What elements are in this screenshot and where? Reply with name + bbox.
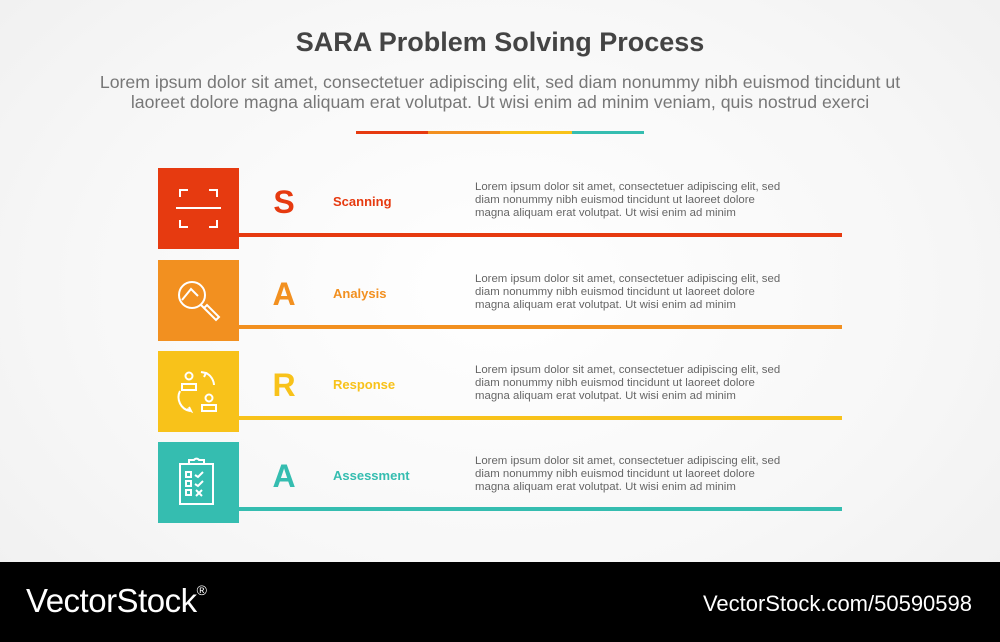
description: Lorem ipsum dolor sit amet, consectetuer adipiscing elit, sed <box>475 181 780 193</box>
description: diam nonummy nibh euismod tincidunt ut laoreet dolore <box>475 468 755 480</box>
label: Assessment <box>333 468 410 483</box>
description: Lorem ipsum dolor sit amet, consectetuer adipiscing elit, sed <box>475 364 780 376</box>
line <box>239 233 842 237</box>
description: magna aliquam erat volutpat. Ut wisi enim ad minim <box>475 481 736 493</box>
description <box>475 181 780 219</box>
row: Assessment <box>158 442 842 523</box>
subtitle: laoreet dolore magna aliquam erat volutpat. Ut wisi enim ad minim veniam, quis nostrud exerci <box>131 92 869 112</box>
line <box>239 416 842 420</box>
row: Response <box>158 351 842 432</box>
description: Lorem ipsum dolor sit amet, consectetuer adipiscing elit, sed <box>475 455 780 467</box>
icon box: people exchange <box>158 351 239 432</box>
letter A: A <box>272 458 296 494</box>
letter A: A <box>272 276 296 312</box>
description: magna aliquam erat volutpat. Ut wisi enim ad minim <box>475 207 736 219</box>
description <box>475 364 780 402</box>
footer url: VectorStock.com/50590598 <box>703 591 972 616</box>
description: diam nonummy nibh euismod tincidunt ut laoreet dolore <box>475 194 755 206</box>
description: magna aliquam erat volutpat. Ut wisi enim ad minim <box>475 390 736 402</box>
letter R: R <box>272 367 296 403</box>
line <box>239 507 842 511</box>
description <box>475 273 780 311</box>
icon box: magnifier <box>158 260 239 341</box>
color bar <box>356 131 644 134</box>
description: diam nonummy nibh euismod tincidunt ut laoreet dolore <box>475 286 755 298</box>
icon box: scan <box>158 168 239 249</box>
title: SARA Problem Solving Process <box>296 27 704 57</box>
subtitle <box>100 72 900 112</box>
row: Scanning <box>158 168 842 249</box>
label: Response <box>333 377 395 392</box>
label: Analysis <box>333 286 386 301</box>
line <box>239 325 842 329</box>
label: Scanning <box>333 194 392 209</box>
footer logo: VectorStock® <box>26 582 206 619</box>
row: Analysis <box>158 260 842 341</box>
letter S: S <box>273 184 295 220</box>
description: diam nonummy nibh euismod tincidunt ut laoreet dolore <box>475 377 755 389</box>
footer bar <box>0 562 1000 642</box>
description: magna aliquam erat volutpat. Ut wisi enim ad minim <box>475 299 736 311</box>
description <box>475 455 780 493</box>
icon box: clipboard <box>158 442 239 523</box>
subtitle: Lorem ipsum dolor sit amet, consectetuer adipiscing elit, sed diam nonummy nibh euismod tincidunt ut <box>100 72 900 92</box>
description: Lorem ipsum dolor sit amet, consectetuer adipiscing elit, sed <box>475 273 780 285</box>
